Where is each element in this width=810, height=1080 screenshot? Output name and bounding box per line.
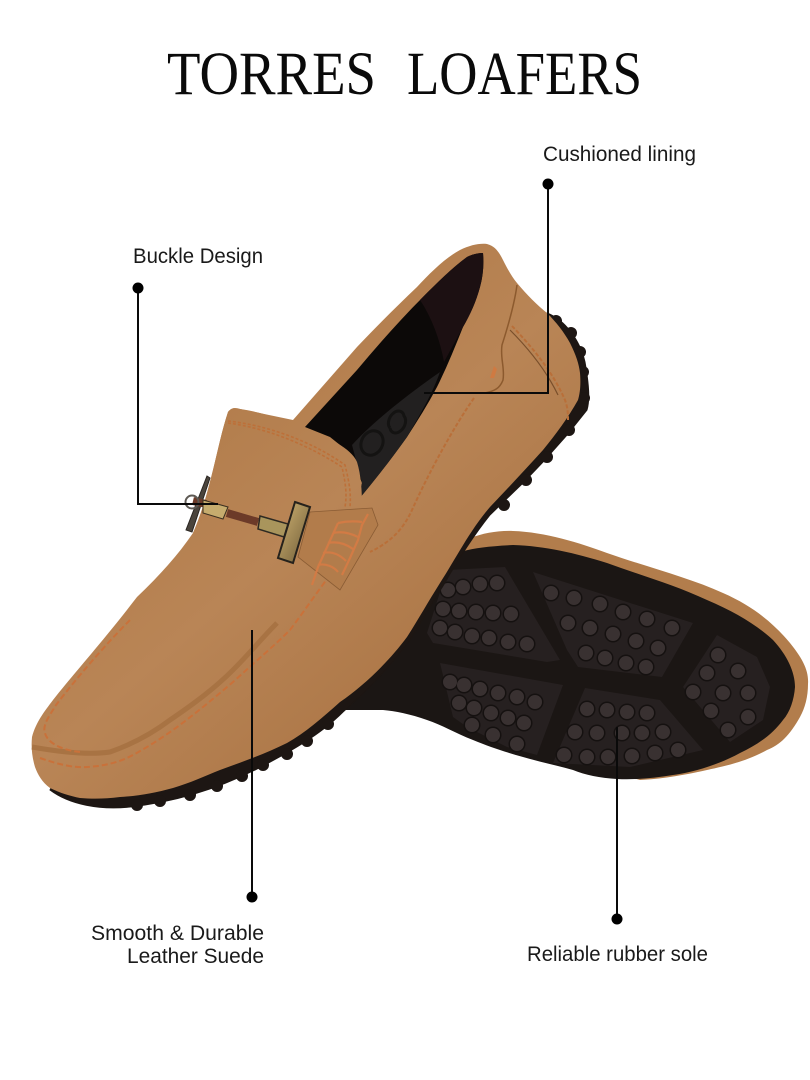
label second line: Leather Suede [127,945,264,968]
tread pebbles shadow [440,583,748,757]
rubber sole base [340,545,795,779]
leader line [138,288,218,504]
outsole pebbles along edge [137,321,584,805]
tab whipstitching [312,514,368,585]
braided cord [193,501,258,522]
title [167,41,642,108]
callout: smooth and durable leather suede [91,630,264,968]
T bar [278,502,310,563]
cushioned insole [352,372,440,500]
tread pebbles [440,583,748,757]
left bar [186,476,210,532]
leader line [424,184,548,393]
dot [612,914,622,924]
label: Cushioned lining [543,143,696,166]
leader line [251,630,253,897]
dot [132,282,144,294]
heel seam [510,330,558,395]
callout: buckle design [132,245,263,504]
suede rim of lower shoe [440,531,808,780]
black lining [305,253,483,500]
right metal sleeve [258,516,288,537]
dot [246,892,258,902]
orange pull tab mark [490,366,497,378]
heel stitching [370,326,568,552]
label: Smooth & Durable [91,922,264,945]
tongue stitching [228,421,350,507]
title word: Torres: TORRES [167,41,376,108]
left metal sleeve [203,500,228,519]
tab leather [298,508,378,590]
label: Buckle Design [133,245,263,268]
collar seam [485,285,517,393]
cord ring [186,496,198,508]
upper shoe [32,244,589,808]
leader line [616,727,618,919]
insole pattern [361,411,406,455]
suede body [32,244,580,799]
heel lining [420,253,483,362]
apron stitching [40,575,330,767]
lower shoe showing rubber sole [340,531,808,780]
callout: cushioned lining [424,143,696,393]
interior opening with lining [305,253,483,500]
outsole edge [50,313,589,808]
apron seam ridge [32,623,277,753]
dot [542,178,554,190]
tongue panel [193,408,362,557]
strap tab [298,508,378,590]
rubber tread panels [427,567,770,767]
title word: Loafers: LOAFERS [407,41,642,108]
callout: reliable rubber sole [527,727,708,966]
buckle hardware [186,476,310,563]
label: Reliable rubber sole [527,943,708,966]
